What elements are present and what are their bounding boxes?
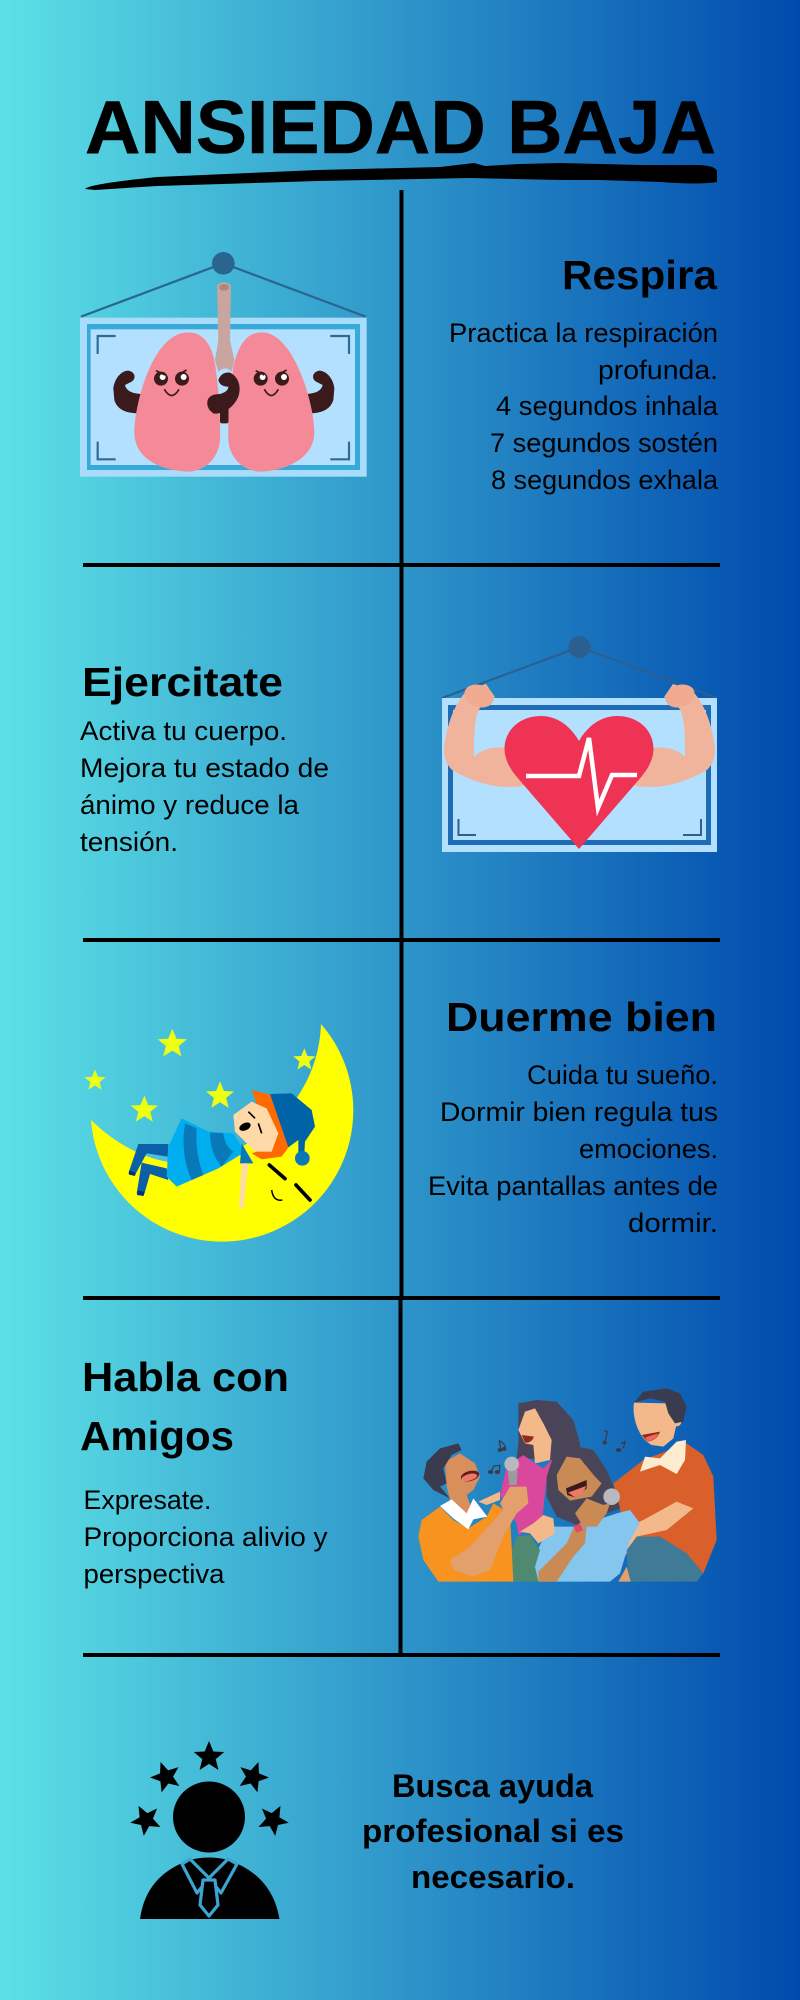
body text: Mejora tu estado de [80, 753, 329, 783]
grid lines [83, 190, 720, 1657]
collar and tie [182, 1859, 237, 1916]
sign frame [80, 318, 367, 477]
callout: busca ayuda: Busca ayuda [392, 1768, 593, 1804]
hair and face [252, 1090, 289, 1159]
panel: ejercitate text [80, 659, 329, 857]
body text: 4 segundos inhala [496, 391, 719, 421]
body text: Cuida tu sueño. [527, 1060, 718, 1090]
body text: Practica la respiración [449, 318, 718, 348]
trachea [215, 282, 234, 372]
body text: dormir. [628, 1208, 718, 1238]
hanging strings and pin [442, 636, 717, 698]
body text: ánimo y reduce la [80, 790, 300, 820]
heading [80, 1354, 289, 1459]
panel: respira text [449, 252, 719, 495]
body text: profunda. [598, 355, 718, 385]
callout: busca ayuda: profesional si es [362, 1813, 624, 1849]
body text [449, 318, 719, 495]
body text: Proporciona alivio y [84, 1522, 328, 1552]
body text: perspectiva [84, 1559, 225, 1589]
body text: Activa tu cuerpo. [80, 716, 287, 746]
panel: ejercitate illustration [442, 636, 717, 852]
body text: emociones. [579, 1134, 718, 1164]
panel: duerme text [428, 994, 718, 1238]
crescent moon [91, 1024, 353, 1242]
body text [84, 1485, 328, 1589]
pulse line [526, 738, 637, 808]
heading: Respira [562, 252, 718, 298]
lungs [134, 332, 314, 472]
resting hand [520, 1515, 555, 1543]
hanging strings and pin [81, 252, 366, 317]
title: ANSIEDAD BAJA [85, 85, 716, 169]
body text: Dormir bien regula tus [440, 1097, 718, 1127]
inner arm [207, 373, 240, 414]
sleeping child [128, 1090, 315, 1208]
panel: amigos text [80, 1354, 328, 1589]
body text [428, 1060, 718, 1238]
lung faces [154, 370, 289, 395]
panel: respira illustration [80, 252, 367, 477]
muscle arms behind lungs [113, 371, 334, 423]
body text: Expresate. [84, 1485, 212, 1515]
green trousers [512, 1535, 540, 1582]
stars [85, 1029, 315, 1122]
legs [128, 1144, 168, 1194]
woman seated [535, 1446, 640, 1582]
music notes [489, 1431, 625, 1473]
body text: 8 segundos exhala [491, 465, 719, 495]
callout: busca ayuda: necesario. [411, 1859, 575, 1895]
body text: tensión. [80, 827, 178, 857]
heart [504, 716, 654, 849]
icon: person with stars [125, 1741, 294, 1919]
panel: duerme illustration [85, 1024, 353, 1242]
man in orange [418, 1443, 528, 1582]
body text: Evita pantallas antes de [428, 1171, 718, 1201]
sign frame [442, 698, 717, 852]
stars [125, 1741, 294, 1839]
moon face [269, 1165, 310, 1200]
heading: Duerme bien [446, 994, 717, 1040]
body [140, 1858, 280, 1919]
muscle arms [444, 681, 715, 787]
striped pyjama [167, 1118, 253, 1187]
head [173, 1782, 245, 1852]
heading: Amigos [80, 1413, 234, 1459]
man on right [593, 1388, 717, 1582]
body text [80, 716, 329, 857]
callout: busca ayuda [362, 1768, 624, 1895]
woman in pink [478, 1400, 580, 1535]
nightcap [270, 1093, 315, 1153]
heading: Ejercitate [82, 659, 283, 705]
body text: 7 segundos sostén [490, 428, 718, 458]
heading: Habla con [82, 1354, 289, 1400]
illustration: friends singing [418, 1388, 717, 1582]
brush underline [85, 163, 717, 190]
